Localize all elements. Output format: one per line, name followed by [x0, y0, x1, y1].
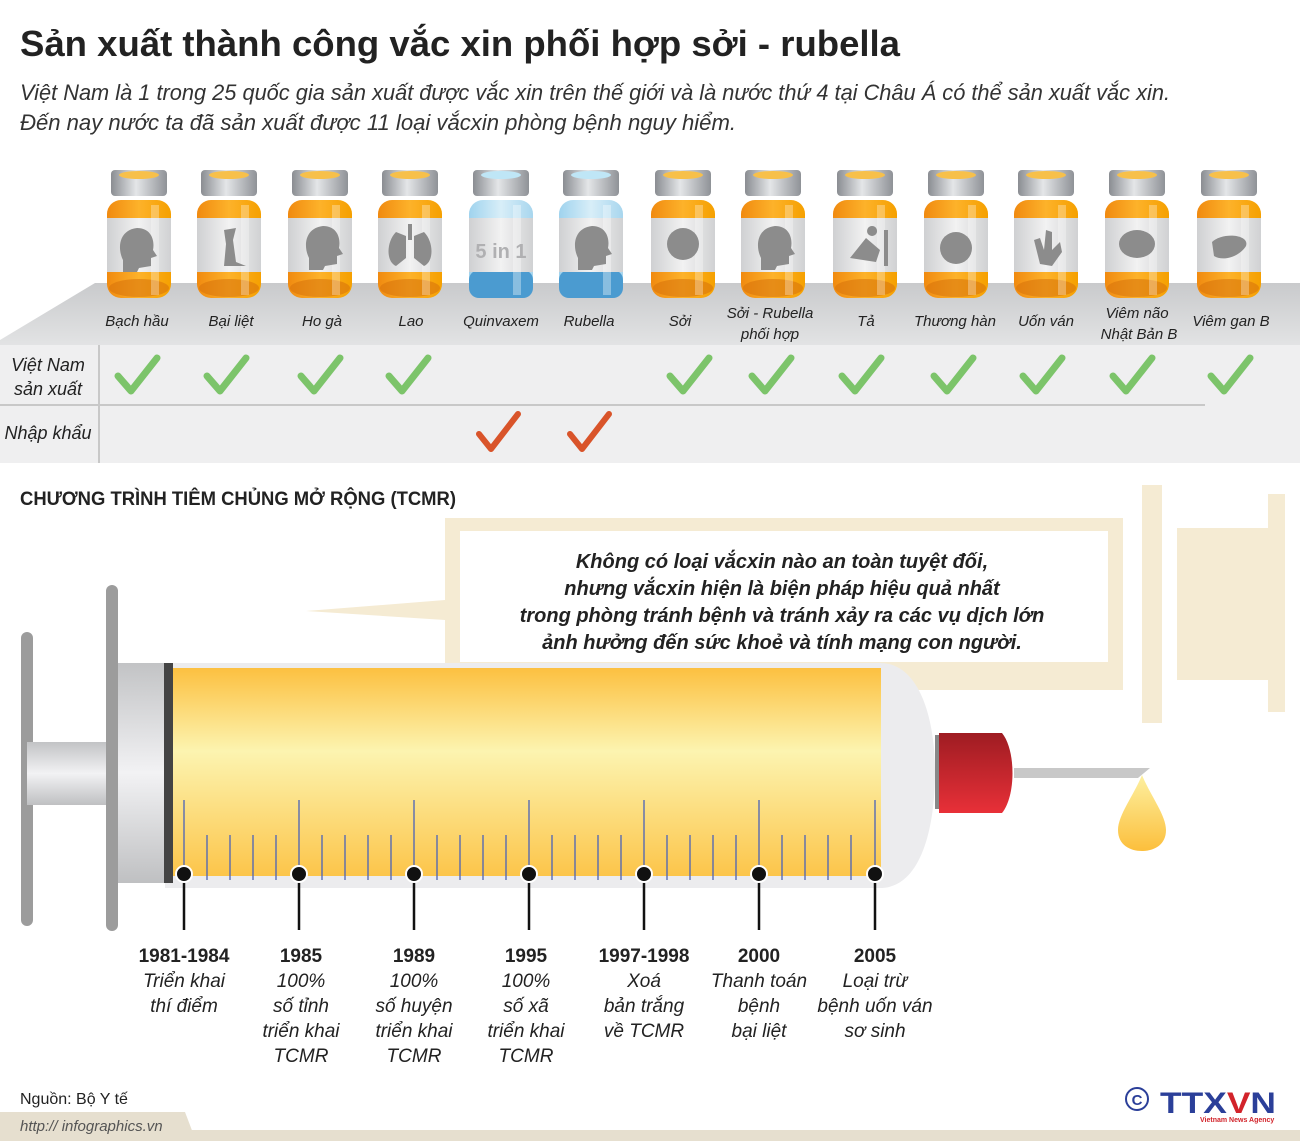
timeline labels: 100%	[502, 971, 550, 992]
timeline labels: TCMR	[387, 1046, 442, 1067]
timeline labels: về TCMR	[604, 1021, 684, 1042]
section heading: CHƯƠNG TRÌNH TIÊM CHỦNG MỞ RỘNG (TCMR)	[20, 488, 456, 510]
timeline labels: Xoá	[626, 971, 661, 992]
table background	[0, 283, 1300, 463]
syringe	[21, 585, 1166, 931]
logo: Vietnam News Agency	[1200, 1117, 1274, 1124]
title: Sản xuất thành công vắc xin phối hợp sởi - rubella	[20, 22, 901, 64]
timeline labels: sơ sinh	[844, 1021, 906, 1042]
timeline labels: 100%	[277, 971, 325, 992]
vaccine names: Lao	[398, 313, 424, 330]
vaccine names: Ho gà	[302, 313, 342, 330]
icon: drop	[1118, 775, 1166, 851]
timeline labels: 1997-1998	[599, 946, 689, 967]
callout bubble: nhưng vắcxin hiện là biện pháp hiệu quả nhất	[564, 577, 1001, 600]
vaccine names: Rubella	[564, 313, 614, 330]
vaccine names: phối hợp	[740, 326, 799, 343]
logo	[1126, 1087, 1276, 1124]
timeline labels: triển khai	[262, 1021, 340, 1042]
timeline labels: bản trắng	[604, 996, 685, 1017]
vaccine names	[105, 305, 1270, 343]
callout bubble: ảnh hưởng đến sức khoẻ và tính mạng con người.	[542, 632, 1022, 654]
vaccine names: Bạch hầu	[105, 313, 169, 330]
timeline labels: bệnh uốn ván	[817, 996, 933, 1017]
callout bubble	[306, 485, 1285, 723]
timeline labels: triển khai	[375, 1021, 453, 1042]
orange checks	[479, 414, 609, 449]
timeline labels: 1981-1984	[139, 946, 230, 967]
callout bubble: trong phòng tránh bệnh và tránh xảy ra các vụ dịch lớn	[520, 605, 1044, 627]
footer: http:// infographics.vn	[20, 1118, 163, 1135]
timeline labels: 1995	[505, 946, 548, 967]
timeline labels: 100%	[390, 971, 438, 992]
timeline labels: bệnh	[738, 996, 780, 1017]
vaccine names: Nhật Bản B	[1101, 326, 1177, 343]
vaccine names: Viêm gan B	[1192, 313, 1270, 330]
timeline labels: 1989	[393, 946, 435, 967]
footer: Nguồn: Bộ Y tế	[20, 1091, 128, 1108]
vials row: 5 in 1	[475, 241, 527, 263]
icons	[120, 228, 157, 272]
timeline labels: 2005	[854, 946, 897, 967]
timeline labels: thí điểm	[150, 996, 218, 1017]
vaccine names: Uốn ván	[1018, 313, 1074, 330]
subtitle: Việt Nam là 1 trong 25 quốc gia sản xuất được vắc xin trên thế giới và là nước thứ 4 tại Châu Á có thể sản xuất vắc xin.	[20, 80, 1170, 105]
timeline labels	[139, 946, 933, 1067]
subtitle: Đến nay nước ta đã sản xuất được 11 loại vắcxin phòng bệnh nguy hiểm.	[20, 110, 736, 135]
footer	[0, 1091, 1300, 1141]
timeline labels: bại liệt	[732, 1021, 787, 1042]
timeline labels: Loại trừ	[843, 971, 909, 992]
row labels	[4, 355, 92, 443]
timeline labels: 2000	[738, 946, 780, 967]
green checks	[118, 358, 1250, 391]
vaccine names: Quinvaxem	[463, 313, 539, 330]
logo: TTX VN	[1160, 1087, 1276, 1120]
timeline labels: số tỉnh	[273, 996, 329, 1017]
vaccine names: Sởi - Rubella	[727, 305, 813, 322]
timeline labels: số xã	[503, 996, 549, 1017]
subtitle	[20, 80, 1170, 135]
logo: C	[1132, 1092, 1143, 1109]
row labels: Việt Nam	[11, 355, 85, 375]
timeline labels: TCMR	[274, 1046, 329, 1067]
vaccine names: Viêm não	[1105, 305, 1169, 322]
callout bubble: Không có loại vắcxin nào an toàn tuyệt đối,	[576, 550, 988, 573]
timeline labels: TCMR	[499, 1046, 554, 1067]
vaccine names: Thương hàn	[914, 313, 996, 330]
timeline labels: Triển khai	[143, 971, 226, 992]
vaccine names: Tả	[857, 313, 875, 330]
timeline labels: số huyện	[375, 996, 453, 1017]
timeline labels: triển khai	[487, 1021, 565, 1042]
vaccine names: Sởi	[669, 313, 692, 330]
timeline labels: Thanh toán	[711, 971, 807, 992]
ticks	[184, 800, 875, 880]
vials row	[107, 170, 1261, 298]
row labels: sản xuất	[14, 379, 83, 399]
timeline labels: 1985	[280, 946, 323, 967]
row labels: Nhập khẩu	[4, 423, 92, 443]
vaccine names: Bại liệt	[208, 313, 254, 330]
